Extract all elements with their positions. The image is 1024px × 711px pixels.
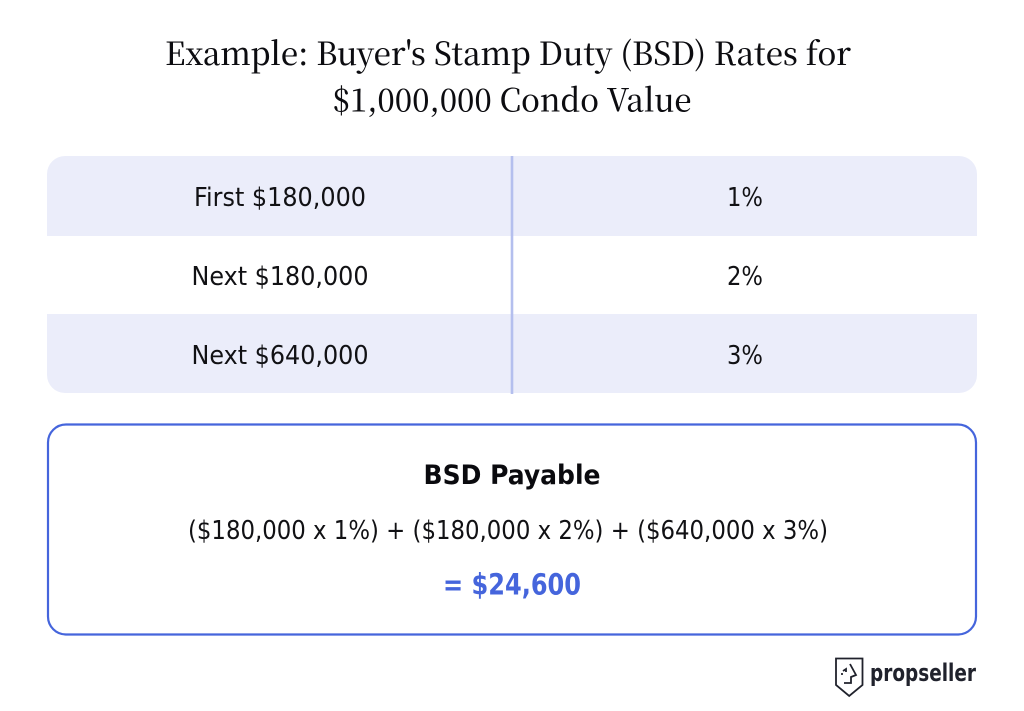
panel heading: BSD Payable bbox=[424, 460, 600, 491]
title: Example: Buyer's Stamp Duty (BSD) Rates for bbox=[165, 29, 851, 75]
rates table bbox=[47, 156, 977, 394]
formula: ($180,000 x 1%) + ($180,000 x 2%) + ($640,000 x 3%) bbox=[188, 516, 828, 546]
row 3 label: Next $640,000 bbox=[192, 341, 368, 371]
row 1 label: First $180,000 bbox=[194, 183, 366, 213]
panel border bbox=[48, 424, 976, 634]
row 3 background bbox=[47, 314, 977, 393]
row 2 rate: 2% bbox=[727, 262, 763, 292]
wordmark: propseller bbox=[870, 659, 976, 687]
propseller logo bbox=[836, 658, 976, 696]
row 1 background bbox=[47, 156, 977, 236]
row 3 rate: 3% bbox=[727, 341, 763, 371]
title: $1,000,000 Condo Value bbox=[332, 76, 692, 122]
title bbox=[165, 29, 851, 122]
row 1 rate: 1% bbox=[727, 183, 763, 213]
row 2 label: Next $180,000 bbox=[192, 262, 368, 292]
BSD payable panel bbox=[48, 424, 976, 634]
result: = $24,600 bbox=[443, 568, 581, 602]
icon: shield bbox=[836, 658, 862, 696]
column divider bbox=[511, 156, 513, 394]
